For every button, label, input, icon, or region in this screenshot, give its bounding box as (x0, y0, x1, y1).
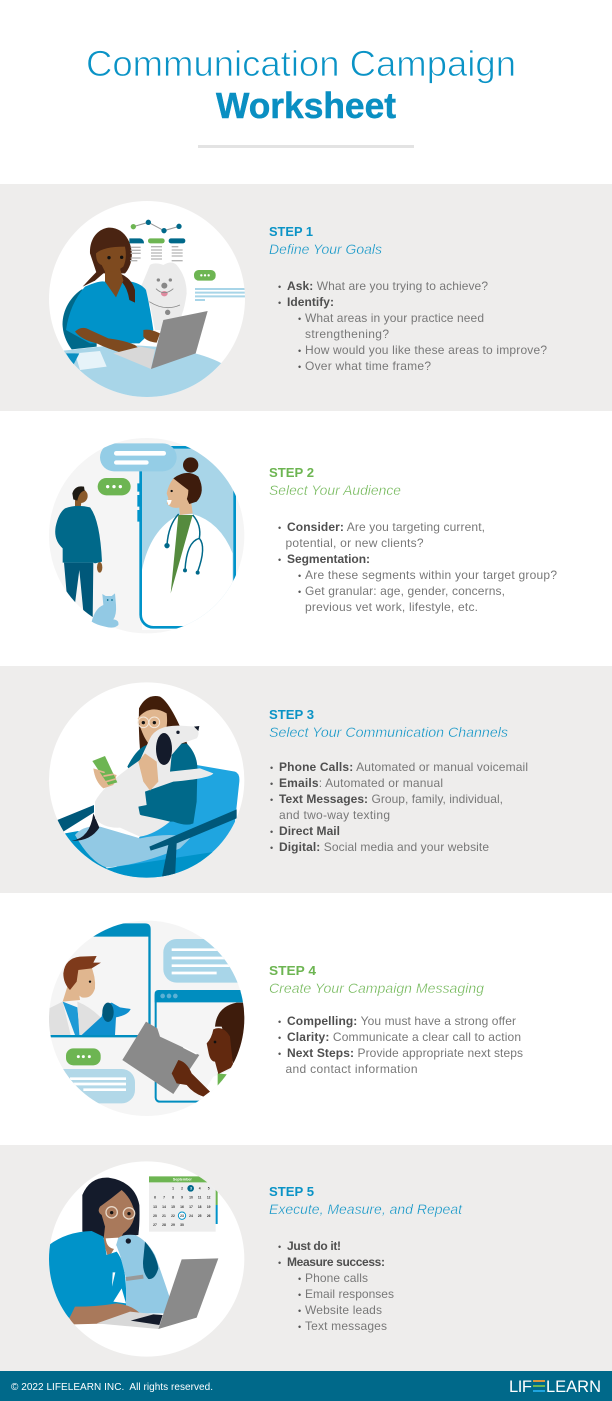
illustration: step 4 video call with message bubbles (43, 921, 257, 1116)
step 4 list: • (278, 1033, 281, 1043)
step 1 list: Over what time frame? (305, 359, 431, 373)
illustration: step 5 woman with dog, laptop and calendar: 9 (181, 1196, 183, 1200)
illustration: step 5 woman with dog, laptop and calendar: 18 (198, 1205, 202, 1209)
title: Communication Campaign (86, 43, 516, 84)
illustration: step 5 woman with dog, laptop and calendar: 17 (189, 1205, 193, 1209)
step 5 list: • (298, 1290, 301, 1300)
illustration: step 5 woman with dog, laptop and calendar: 29 (171, 1223, 175, 1227)
step 3 subtitle: Select Your Communication Channels (269, 724, 508, 740)
step 2 heading: STEP 2 (269, 465, 314, 480)
step 3 heading: STEP 3 (269, 707, 314, 722)
step 2 list: Segmentation: (287, 552, 370, 566)
illustration: step 5 woman with dog, laptop and calendar: 2 (181, 1187, 183, 1191)
illustration: step 5 woman with dog, laptop and calendar: 22 (171, 1214, 175, 1218)
step 2 list: • (298, 587, 301, 597)
illustration: step 5 woman with dog, laptop and calendar: 23 (180, 1214, 184, 1218)
illustration: step 5 woman with dog, laptop and calendar: 10 (189, 1196, 193, 1200)
step 2 list: Get granular: age, gender, concerns, (305, 584, 505, 598)
illustration: step 5 woman with dog, laptop and calendar: 5 (208, 1187, 210, 1191)
step 1 list: Identify: (287, 295, 334, 309)
step 1 list: • (298, 346, 301, 356)
copyright: © 2022 LIFELEARN INC. All rights reserved. (11, 1382, 213, 1393)
step 5 list: Just do it! (287, 1239, 341, 1253)
step 4 heading: STEP 4 (269, 963, 317, 978)
step 2 list: • (298, 571, 301, 581)
illustration: step 5 woman with dog, laptop and calendar: 1 (172, 1187, 174, 1191)
step 3 list: • (270, 843, 273, 853)
step 3 list: Emails: Automated or manual (279, 776, 443, 790)
illustration: step 5 woman with dog, laptop and calendar: 15 (171, 1205, 175, 1209)
step 5 list: • (298, 1322, 301, 1332)
step 2 list: Are these segments within your target group? (305, 568, 557, 582)
step 4 list (278, 1014, 523, 1076)
illustration: step 5 woman with dog, laptop and calendar: September (173, 1178, 192, 1182)
title (86, 43, 516, 126)
icon: cat (92, 593, 118, 628)
step 1 list: • (298, 362, 301, 372)
illustration: step 5 woman with dog, laptop and calendar: 27 (153, 1223, 157, 1227)
step 3 list: • (270, 779, 273, 789)
step 5 subtitle: Execute, Measure, and Repeat (269, 1201, 463, 1217)
step 2 list: Consider: Are you targeting current, (287, 520, 485, 534)
step 3 list: • (270, 763, 273, 773)
step 5 list: Text messages (305, 1319, 387, 1333)
illustration: step 2 client and veterinarian on phone (49, 438, 244, 633)
step 5 list (278, 1239, 394, 1333)
step 4 list: Clarity: Communicate a clear call to action (287, 1030, 521, 1044)
illustration: step 1 woman at laptop with dog (49, 201, 245, 403)
illustration: step 5 woman with dog, laptop and calendar: 19 (207, 1205, 211, 1209)
illustration: step 5 woman with dog, laptop and calendar: 16 (180, 1205, 184, 1209)
illustration: step 5 woman with dog, laptop and calendar: 11 (198, 1196, 202, 1200)
step 1 list (278, 279, 547, 373)
illustration: step 5 woman with dog, laptop and calendar: 28 (162, 1223, 166, 1227)
step 1 list: strengthening? (305, 327, 389, 341)
step 4 list: and contact information (286, 1062, 418, 1076)
step 5 list: Email responses (305, 1287, 394, 1301)
step 3 list: Digital: Social media and your website (279, 840, 489, 854)
step 2 subtitle: Select Your Audience (269, 482, 401, 498)
illustration: step 5 woman with dog, laptop and calendar: 25 (198, 1214, 202, 1218)
panel: step 1 background (0, 184, 612, 411)
illustration: step 5 woman with dog, laptop and calendar: 14 (162, 1205, 166, 1209)
step 4 subtitle: Create Your Campaign Messaging (269, 980, 484, 996)
step 1 list: • (298, 314, 301, 324)
step 1 list: How would you like these areas to improve? (305, 343, 547, 357)
step 3 list: • (270, 827, 273, 837)
step 4 list: • (278, 1017, 281, 1027)
illustration: step 5 woman with dog, laptop and calendar: 6 (154, 1196, 156, 1200)
step 4 list: • (278, 1049, 281, 1059)
logo: LIF (509, 1378, 532, 1396)
illustration: step 5 woman with dog, laptop and calendar: 12 (207, 1196, 211, 1200)
illustration: step 5 woman with dog, laptop and calendar: 21 (162, 1214, 166, 1218)
step 5 list: • (278, 1242, 281, 1252)
step 3 list: Text Messages: Group, family, individual, (279, 792, 503, 806)
step 1 subtitle: Define Your Goals (269, 241, 382, 257)
step 3 list: Phone Calls: Automated or manual voicemail (279, 760, 528, 774)
illustration: step 5 woman with dog, laptop and calendar: 30 (180, 1223, 184, 1227)
illustration: step 5 woman with dog, laptop and calendar (49, 1161, 244, 1357)
logo: LEARN (546, 1378, 601, 1396)
step 5 list: • (298, 1306, 301, 1316)
illustration: step 5 woman with dog, laptop and calendar: 20 (153, 1214, 157, 1218)
logo (509, 1378, 601, 1396)
illustration: step 5 woman with dog, laptop and calendar: 26 (207, 1214, 211, 1218)
step 3 list: • (270, 795, 273, 805)
step 1 list: • (278, 282, 281, 292)
step 3 list: Direct Mail (279, 824, 340, 838)
step 1 list: • (278, 298, 281, 308)
step 1 heading: STEP 1 (269, 224, 313, 239)
step 5 list: • (278, 1258, 281, 1268)
step 3 list (270, 760, 528, 854)
step 5 heading: STEP 5 (269, 1184, 314, 1199)
footer (0, 1371, 612, 1401)
step 5 list: • (298, 1274, 301, 1284)
illustration: step 5 woman with dog, laptop and calendar: 3 (190, 1187, 192, 1191)
step 2 list: • (278, 523, 281, 533)
panel: step 5 background (0, 1145, 612, 1371)
step 4 list: Compelling: You must have a strong offer (287, 1014, 516, 1028)
step 3 list: and two-way texting (279, 808, 390, 822)
step 4 list: Next Steps: Provide appropriate next steps (287, 1046, 523, 1060)
step 1 list: Ask: What are you trying to achieve? (287, 279, 488, 293)
illustration: step 5 woman with dog, laptop and calendar: 8 (172, 1196, 174, 1200)
illustration: step 5 woman with dog, laptop and calendar: 24 (189, 1214, 193, 1218)
step 5 list: Phone calls (305, 1271, 368, 1285)
step 2 list: • (278, 555, 281, 565)
title: Worksheet (216, 85, 396, 126)
panel: step 3 background (0, 666, 612, 893)
step 5 list: Measure success: (287, 1255, 385, 1269)
illustration: step 5 woman with dog, laptop and calendar: 7 (163, 1196, 165, 1200)
step 2 list (278, 520, 557, 614)
illustration: step 3 woman on chair with dog and phone (49, 682, 244, 882)
step 5 list: Website leads (305, 1303, 382, 1317)
step 1 list: What areas in your practice need (305, 311, 484, 325)
illustration: step 5 woman with dog, laptop and calendar: 13 (153, 1205, 157, 1209)
step 2 list: previous vet work, lifestyle, etc. (305, 600, 478, 614)
illustration: step 5 woman with dog, laptop and calendar: 4 (199, 1187, 201, 1191)
step 2 list: potential, or new clients? (286, 536, 424, 550)
